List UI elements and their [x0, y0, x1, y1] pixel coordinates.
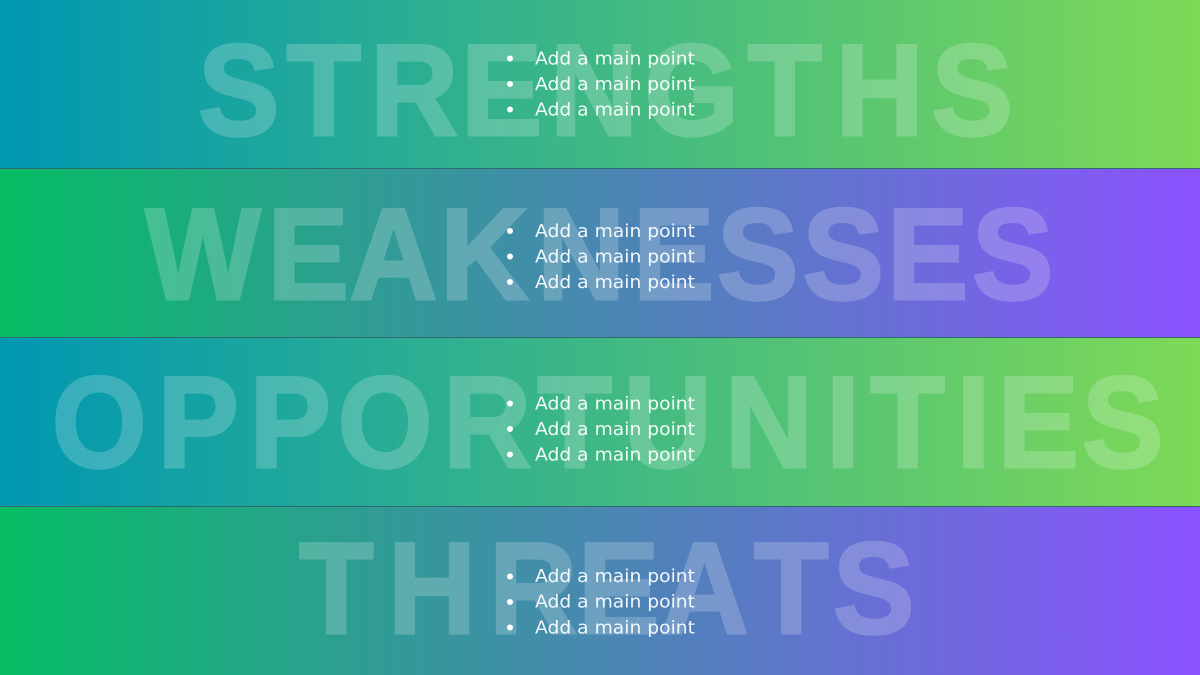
- panel: weaknesses: [0, 169, 1200, 337]
- bullet list: weaknesses: Add a main point: [535, 246, 695, 268]
- bullet list: threats: Add a main point: [535, 566, 695, 587]
- bullet list: opportunities: Add a main point: [535, 419, 695, 440]
- bullet list: weaknesses: Add a main point: [535, 221, 695, 242]
- heading: weaknesses: WEAKNESSES: [145, 181, 1053, 327]
- bullet list: strengths: Add a main point: [535, 48, 695, 70]
- bullet list: strengths: Add a main point: [535, 100, 695, 120]
- bullet list: opportunities: Add a main point: [535, 444, 695, 466]
- panel: strengths: [0, 0, 1200, 168]
- panel: threats: [0, 507, 1200, 675]
- panel: opportunities: [0, 338, 1200, 506]
- bullet list: threats: [507, 566, 695, 638]
- heading: strengths: STRENGTHS: [198, 17, 1013, 163]
- heading: opportunities: OPPORTUNITIES: [52, 349, 1163, 495]
- bullet list: threats: Add a main point: [535, 592, 695, 612]
- bullet list: strengths: [507, 48, 695, 120]
- bullet list: opportunities: [507, 394, 695, 466]
- bullet list: strengths: Add a main point: [535, 74, 695, 95]
- bullet list: weaknesses: Add a main point: [535, 272, 695, 293]
- bullet list: opportunities: Add a main point: [535, 394, 695, 414]
- bullet list: threats: Add a main point: [535, 618, 695, 638]
- bullet list: weaknesses: [507, 221, 695, 293]
- heading: threats: THREATS: [299, 515, 914, 661]
